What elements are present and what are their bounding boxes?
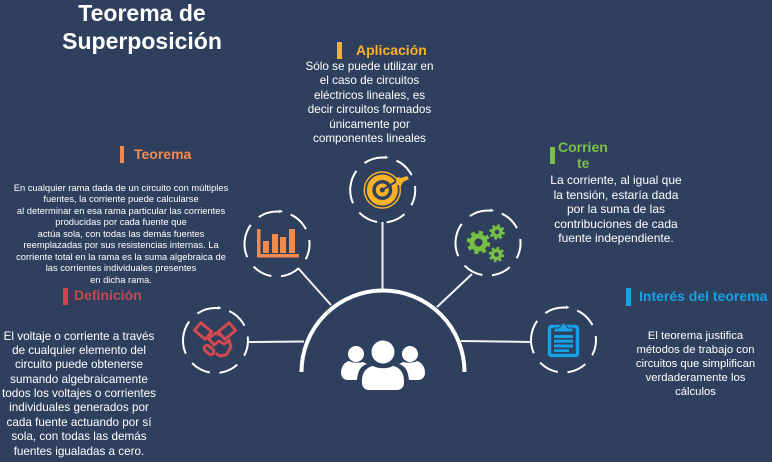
text: aplicación: el caso de circuitos <box>320 74 419 87</box>
text: aplicación: componentes lineales <box>313 132 426 145</box>
heading: definición: Definición <box>74 287 142 303</box>
text: definición <box>2 330 156 458</box>
text: teorema: reemplazadas por sus resistencias internas. La <box>23 240 219 250</box>
heading: corriente: Corrien <box>558 139 608 155</box>
text: aplicación: eléctricos lineales, es <box>314 89 425 102</box>
text: definición: circuito puede obtenerse <box>15 358 143 371</box>
text: aplicación: decir circuitos formados <box>308 103 431 116</box>
icon: bar chart <box>257 229 299 258</box>
text: interés: verdaderamente los <box>646 372 745 384</box>
connector lines <box>249 222 531 342</box>
icon: target <box>364 172 409 208</box>
text: teorema: en dicha rama. <box>90 274 152 284</box>
text: teorema: actúa sola, con todas las demás fuentes <box>38 228 204 238</box>
ring: teorema <box>232 199 322 289</box>
text: definición: de cualquier elemento del <box>12 344 146 357</box>
text: definición: sumando algebraicamente <box>10 373 148 386</box>
heading: teorema: Teorema <box>134 146 191 162</box>
text: definición: todos los voltajes o corrientes <box>2 387 156 400</box>
text: corriente: La corriente, al igual que <box>550 173 682 187</box>
text: teorema: corriente total en la rama es la suma algebraica de <box>16 252 226 262</box>
heading: interés del teorema: Interés del teorema <box>639 288 767 304</box>
text: definición: individuales generados por <box>9 401 149 414</box>
icon: handshake <box>194 323 236 356</box>
central semicircle arc <box>302 290 464 372</box>
icon: clipboard <box>550 323 578 356</box>
text: aplicación <box>306 60 434 145</box>
icon: group of people <box>341 340 425 390</box>
text: teorema: fuentes, la corriente puede calcularse <box>43 194 199 204</box>
text: definición: fuentes igualadas a cero. <box>14 445 144 458</box>
text: aplicación: únicamente por <box>329 118 410 131</box>
text: interés <box>636 330 755 398</box>
text: corriente: contribuciones de cada <box>554 216 678 230</box>
heading: aplicación: Aplicación <box>356 42 427 58</box>
icon: gears <box>468 226 504 261</box>
title <box>62 0 222 54</box>
text: corriente: la tensión, estaría dada <box>554 188 678 202</box>
ring: aplicación <box>338 145 428 235</box>
ring: interés <box>518 295 609 385</box>
ring: corriente <box>443 198 533 288</box>
text: teorema: al determinar en esa rama particular las corrientes <box>17 206 225 216</box>
text: corriente: fuente independiente. <box>558 231 674 245</box>
text: teorema <box>14 182 228 284</box>
text: interés: cálculos <box>675 386 716 398</box>
text: corriente: por la suma de las <box>567 202 665 216</box>
text: definición: sola, con todas las demás <box>11 430 147 443</box>
title: Superposición <box>62 28 222 54</box>
text: teorema: las corrientes individuales presentes <box>46 263 196 273</box>
text: interés: métodos de trabajo con <box>636 344 755 356</box>
heading: corriente: te <box>577 155 589 171</box>
heading: corriente <box>550 139 608 171</box>
text: teorema: producidas por cada fuente que <box>55 217 187 227</box>
text: definición: El voltaje o corriente a través <box>4 330 154 342</box>
title: Teorema de <box>78 0 206 26</box>
text: definición: cada fuente actuando por sí <box>7 416 151 429</box>
text: corriente <box>550 173 682 245</box>
text: aplicación: Sólo se puede utilizar en <box>306 60 434 72</box>
text: teorema: En cualquier rama dada de un circuito con múltiples <box>14 182 228 192</box>
text: interés: circuitos que simplifican <box>636 358 755 370</box>
ring: definición <box>170 295 261 386</box>
text: interés: El teorema justifica <box>648 330 743 342</box>
